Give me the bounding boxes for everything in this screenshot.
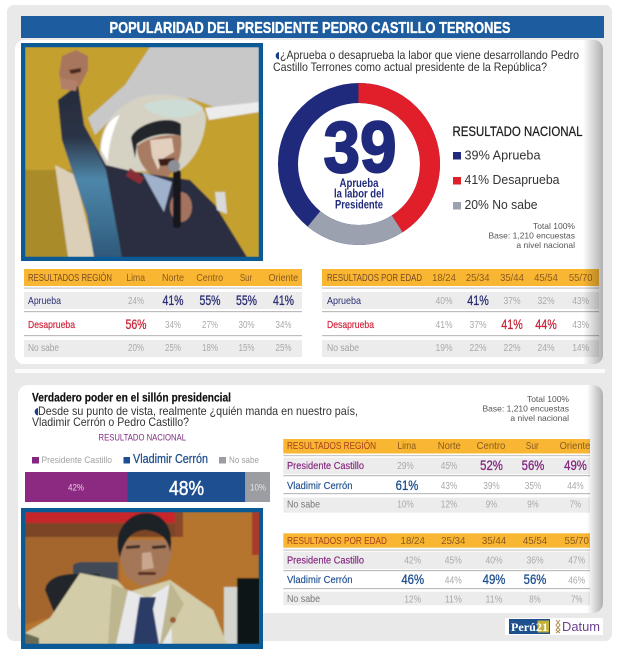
legend: power: Vladimir Cerrón [133,452,208,466]
table: results by region: 34% [165,320,181,331]
table: age, power: 8% [529,594,541,605]
table: results by age: 37% [470,320,487,331]
table: age, power: 11% [486,594,503,605]
table: region, power: Norte [438,440,461,452]
table: results by region: 41% [273,293,294,308]
legend: national result: RESULTADO NACIONAL [452,123,583,139]
logos [505,618,603,635]
table: region, power: Lima [397,440,416,452]
table: region, power: 45% [441,461,457,472]
table: age, power: RESULTADOS POR EDAD [287,535,387,547]
stacked bar chart: 48% [169,478,204,500]
survey base note [483,394,569,423]
legend: power: Presidente Castillo [42,455,112,466]
table: results by age: 25/34 [466,272,490,284]
donut chart: Presidente [335,200,383,212]
table: results by region: 34% [276,320,292,331]
table: age, power: 45/54 [523,535,547,547]
table: results by age: 35/44 [500,272,524,284]
icon: half moon bullet [276,52,279,60]
panel: real power [18,385,603,613]
table: region, power: RESULTADOS REGIÓN [287,439,376,452]
table: age, power: 11% [445,594,462,605]
table: age, power: Presidente Castillo [287,554,364,566]
table: results by age: Desaprueba [327,319,374,331]
table: results by region: 24% [128,296,144,307]
table: results by region: 25% [276,343,292,354]
icon: half moon bullet [35,408,38,416]
table: results by region: Desaprueba [28,319,75,331]
table: results by age: 44% [535,317,557,332]
table: results by age: 40% [436,296,453,307]
panel edge shading [583,40,603,613]
table: region, power: 43% [441,481,457,492]
table: results by age: 19% [436,343,453,354]
table: results by region: 30% [238,320,255,331]
table: region, power [283,439,590,513]
table: results by region: Aprueba [28,295,61,307]
donut chart: la labor del [334,188,384,200]
table: results by region: RESULTADOS REGIÓN [28,271,112,284]
table: results by age: 22% [504,343,521,354]
table: results by age: Aprueba [327,295,361,307]
table: region, power: Oriente [560,440,590,452]
table: age, power: 18/24 [401,535,425,547]
table: age, power: 45% [445,555,462,566]
table: results by region: Norte [162,272,184,284]
question text: who governs: Desde su punto de vista, realmente ¿quién manda en nuestro país, [38,404,358,418]
table: results by region: 55% [200,293,220,308]
table: region, power: 7% [570,500,581,511]
stacked bar chart [25,472,270,502]
white separator strip [15,369,605,373]
table: results by age: 41% [467,293,489,308]
table: results by age: 45/54 [534,272,558,284]
table: results by region [24,269,302,357]
table: region, power: 9% [486,500,497,511]
survey base note: Base: 1,210 encuestas [483,404,569,414]
panel: presidential popularity [15,40,603,364]
table: results by age: RESULTADOS POR EDAD [327,272,422,284]
table: age, power: 56% [524,572,546,587]
donut chart: 39 [324,108,396,188]
table: results by age: 41% [501,317,523,332]
table: region, power: 29% [397,461,414,472]
table: region, power: 10% [397,500,414,511]
table: results by age: 24% [538,343,555,354]
table: region, power: Vladimir Cerrón [287,480,353,492]
table: age, power: 42% [404,555,421,566]
table: region, power: No sabe [287,499,320,511]
table: results by age: 41% [436,320,453,331]
table: age, power: 36% [526,555,544,566]
table: results by region: Lima [126,272,145,284]
table: results by region: 27% [202,320,218,331]
question text: who governs: Vladimir Cerrón o Pedro Castillo? [32,415,189,429]
photo: Vladimir Cerrón [21,508,263,649]
table: results by age: 22% [470,343,487,354]
table: age, power: 55/70 [565,535,589,547]
table: results by region: Oriente [268,272,298,284]
table: region, power: 52% [480,458,503,473]
table: results by age: 43% [572,296,589,307]
table: results by age: 14% [572,343,589,354]
table: region, power: 35% [525,481,541,492]
survey base note: Base: 1,210 encuestas [489,230,575,240]
stacked bar chart: 10% [250,482,266,494]
table: region, power: Presidente Castillo [287,460,364,472]
table: region, power: Sur [526,440,539,452]
legend: power [32,452,259,466]
table: region, power: 44% [567,481,584,492]
photo: Pedro Castillo [21,43,263,261]
table: results by age: 55/70 [569,272,593,284]
table: results by region: 41% [162,293,184,308]
logo: Perú21: Perú21 [511,620,548,634]
donut chart: Aprueba [340,178,379,190]
table: results by age: 43% [572,320,589,331]
question text: ¿Aprueba o desaprueba la labor que viene desarrollando Pedro [280,48,579,62]
table: age, power: 46% [568,575,585,586]
table: results by region: Sur [240,272,253,284]
survey base note: Total 100% [527,394,569,404]
table: region, power: 61% [396,478,418,493]
table: results by region: 15% [238,343,255,354]
survey base note: a nivel nacional [510,413,569,423]
survey base note: a nivel nacional [516,240,575,250]
subheading: national result: RESULTADO NACIONAL [98,433,186,444]
title banner: POPULARIDAD DEL PRESIDENTE PEDRO CASTILLO TERRONES [110,20,511,37]
question text: Castillo Terrones como actual presidente de la República? [273,60,547,74]
table: results by region: No sabe [28,342,59,354]
legend: power: No sabe [229,455,259,466]
table: region, power: Centro [477,440,505,452]
table: results by region: 20% [128,343,144,354]
logo: Datum: Datum [562,619,600,634]
table: age, power: Vladimir Cerrón [287,574,353,586]
table: age, power: 12% [404,594,421,605]
heading: real power: Verdadero poder en el sillón presidencial [32,390,231,404]
table: age, power: 40% [486,555,503,566]
table: age, power: 46% [401,572,424,587]
question text: who governs [32,404,358,429]
table: results by region: 56% [126,317,146,332]
table: results by age: 37% [504,296,521,307]
table: results by age: 18/24 [432,272,456,284]
table: region, power: 49% [564,458,587,473]
title banner [21,16,604,38]
table: age, power: 49% [483,572,505,587]
table: age, power: 7% [571,594,583,605]
table: region, power: 9% [527,500,539,511]
legend: national result [452,123,583,212]
table: age, power: 25/34 [441,535,466,547]
question text [273,48,579,74]
legend: national result: 41% Desaprueba [464,172,560,187]
table: region, power: 56% [522,458,544,473]
table: age, power: No sabe [287,593,320,605]
stacked bar chart: 42% [68,482,84,494]
table: age, power: 47% [568,555,585,566]
table: results by region: 55% [236,293,257,308]
table: age, power [283,533,590,605]
table: results by region: 18% [202,343,218,354]
legend: national result: 20% No sabe [464,197,538,212]
table: region, power: 39% [483,481,500,492]
table: results by age: No sabe [327,342,359,354]
survey base note: Total 100% [533,221,575,231]
table: results by age: 32% [538,296,555,307]
table: results by age [322,269,599,357]
table: age, power: 35/44 [482,535,506,547]
legend: national result: 39% Aprueba [464,148,541,162]
table: region, power: 12% [441,500,457,511]
table: age, power: 44% [445,575,462,586]
donut chart [288,93,430,235]
table: results by region: 25% [165,343,181,354]
survey base note [489,221,575,250]
table: results by region: Centro [196,272,223,284]
